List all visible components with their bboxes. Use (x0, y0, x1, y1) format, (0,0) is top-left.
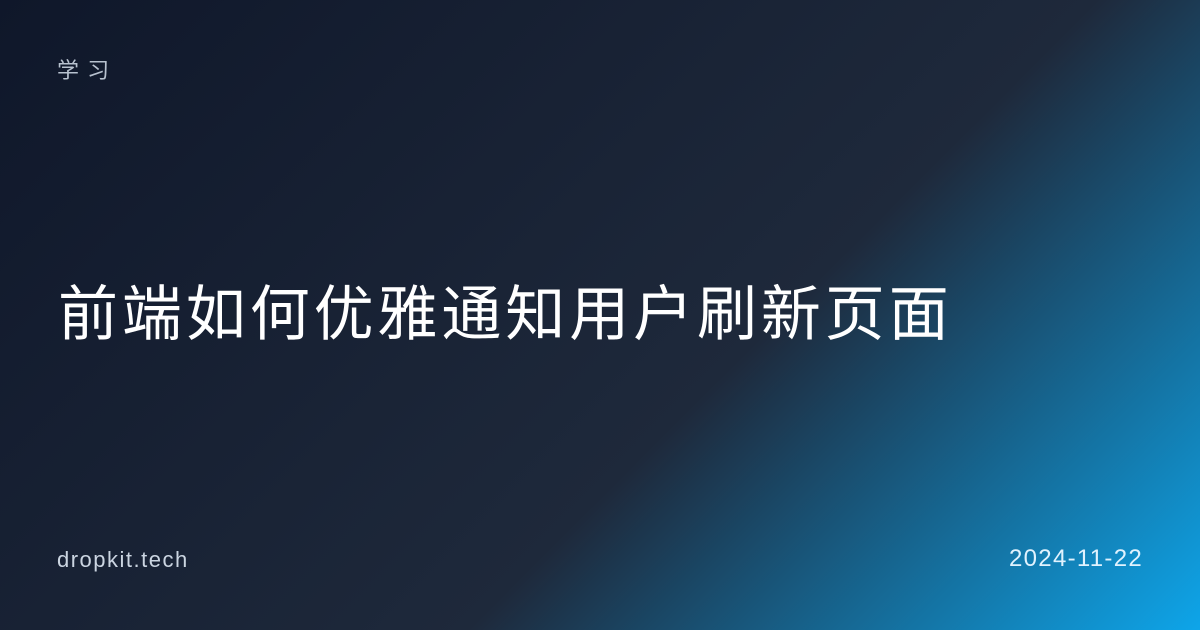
date: 2024-11-22 (1009, 545, 1143, 572)
site name: dropkit.tech (57, 547, 189, 572)
title: 前端如何优雅通知用户刷新页面 (58, 281, 953, 348)
category tag: 学 习 (57, 58, 110, 83)
